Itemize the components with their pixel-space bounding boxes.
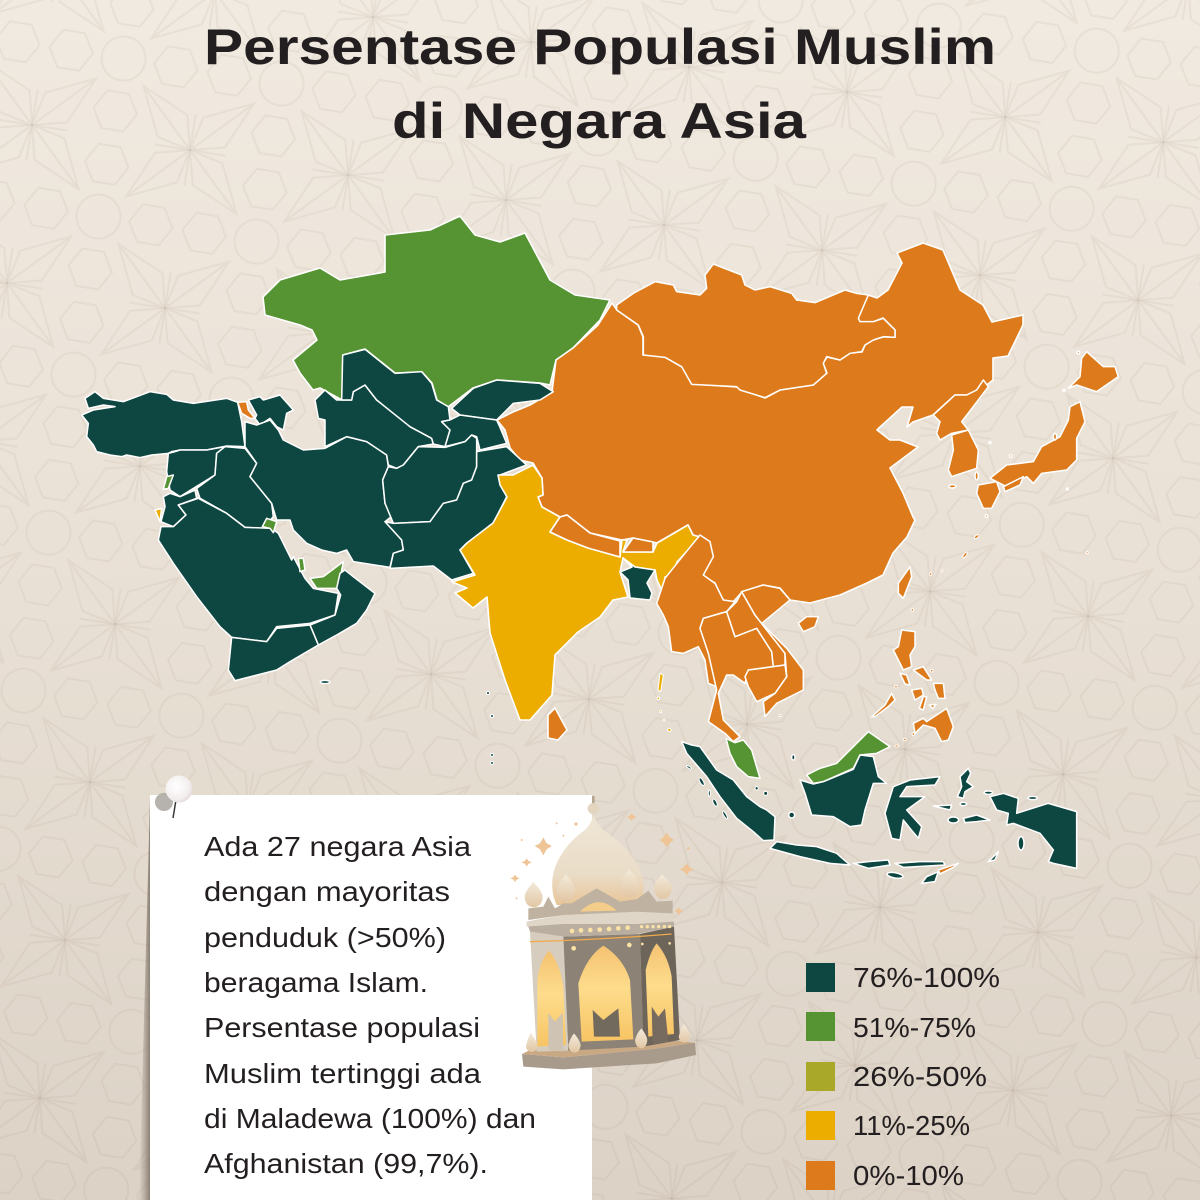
title: di Negara Asia: [392, 93, 807, 149]
Mongolia: [617, 264, 895, 398]
Shikoku: [1003, 477, 1023, 492]
Jordan: [161, 490, 197, 527]
Iran: [245, 420, 403, 567]
small scattered islands: [779, 534, 1088, 717]
Indonesian islands: [686, 755, 1037, 883]
Halmahera: [957, 768, 973, 798]
region: Korea and Japan: [933, 351, 1118, 517]
Iraq: [197, 447, 273, 528]
Mindanao: [913, 708, 953, 742]
card text: beragama Islam.: [204, 967, 428, 998]
Oman: [310, 570, 375, 645]
Thailand: [700, 612, 773, 742]
Maldives: [486, 692, 494, 764]
icon: mosque lantern: [510, 796, 696, 1069]
Palawan: [872, 693, 895, 717]
Hainan: [798, 617, 818, 632]
Timor-Leste: [938, 863, 958, 874]
icon: push pin: [155, 776, 192, 818]
card text: di Maladewa (100%) dan: [204, 1103, 536, 1134]
China: [497, 243, 1023, 603]
small domes: [525, 869, 690, 1053]
Philippine small islands: [895, 669, 933, 747]
Sabah and Sarawak: [807, 732, 890, 783]
Myanmar: [657, 535, 735, 687]
Kalimantan: [800, 755, 887, 827]
arches: [537, 951, 566, 1047]
legend item: 11%-25%: 11%-25%: [853, 1110, 970, 1141]
title: [204, 19, 996, 149]
Honshu: [990, 402, 1085, 487]
main dome: [552, 815, 644, 905]
Lebanon: [163, 475, 173, 489]
Kyrgyzstan: [452, 380, 553, 420]
base: [522, 1043, 696, 1069]
Saudi Arabia: [158, 498, 338, 642]
card text: Persentase populasi: [204, 1012, 480, 1043]
Tajikistan: [442, 415, 507, 450]
legend item: 51%-75%: 51%-75%: [853, 1012, 976, 1043]
Afghanistan: [383, 435, 477, 523]
Syria: [167, 447, 225, 497]
Luzon: [893, 630, 915, 670]
card text: penduduk (>50%): [204, 922, 446, 953]
Bhutan: [623, 538, 653, 552]
card shadow: [139, 800, 150, 1200]
legend item: 26%-50%: 26%-50%: [853, 1061, 987, 1092]
UAE: [310, 562, 343, 588]
legend item: 0%-10%: [806, 1160, 964, 1191]
Uzbekistan: [342, 349, 450, 447]
Nepal: [550, 515, 620, 557]
South Korea: [948, 430, 978, 477]
region: Southeast Asia: [657, 534, 1088, 883]
Turkey: [82, 392, 245, 458]
body: [530, 932, 568, 1052]
Bicol: [913, 667, 932, 680]
card text: [204, 831, 536, 1179]
Cebu: [929, 704, 936, 709]
title: Persentase Populasi Muslim: [204, 19, 996, 75]
region: South Asia: [452, 465, 700, 764]
window dots: [570, 925, 671, 951]
India: [452, 465, 700, 720]
card text: dengan mayoritas: [204, 876, 450, 907]
Sumatra: [682, 742, 775, 841]
card text: Afghanistan (99,7%).: [204, 1148, 488, 1179]
Armenia: [238, 402, 255, 418]
region: Philippines: [872, 630, 953, 747]
Mindoro: [900, 673, 910, 685]
card text: Muslim tertinggi ada: [204, 1058, 481, 1089]
Hokkaido: [1068, 352, 1118, 392]
note card: [139, 795, 592, 1200]
map of Asia: [82, 216, 1118, 883]
small islands: [949, 351, 1080, 517]
parapet: [528, 888, 673, 920]
Panay: [912, 688, 923, 700]
legend item: 0%-10%: 0%-10%: [853, 1160, 964, 1191]
Azerbaijan: [248, 395, 293, 430]
Laos: [727, 592, 785, 667]
legend item: 76%-100%: 76%-100%: [853, 962, 1000, 993]
Java: [770, 842, 850, 865]
Samar and Leyte: [933, 683, 945, 698]
North Korea: [933, 380, 988, 440]
Cambodia: [745, 665, 787, 702]
Andaman and Nicobar: [657, 673, 671, 732]
Pakistan: [385, 447, 527, 580]
card paper: [150, 795, 592, 1200]
region: Central Asia and China, Mongolia: [263, 216, 1023, 603]
Kazakhstan: [263, 216, 610, 407]
Vietnam: [742, 585, 803, 717]
Peninsular Malaysia: [726, 738, 760, 778]
Papua: [990, 793, 1077, 868]
Israel: [155, 508, 162, 522]
sparkles: [510, 813, 693, 915]
legend item: 26%-50%: [806, 1061, 987, 1092]
roof band: [527, 912, 674, 937]
Taiwan: [898, 567, 912, 598]
legend: [806, 962, 1000, 1191]
Turkmenistan: [315, 385, 433, 468]
Kuwait: [262, 518, 277, 533]
Kyushu: [977, 482, 1000, 508]
Socotra: [320, 680, 330, 684]
Sulawesi: [885, 777, 940, 840]
region: Middle East and Central Asia countries: [82, 349, 553, 684]
Sri Lanka: [548, 708, 567, 740]
Qatar: [298, 558, 305, 572]
Bangladesh: [620, 558, 655, 600]
Negros: [919, 697, 927, 710]
Yemen: [228, 625, 318, 681]
card text: Ada 27 negara Asia: [204, 831, 471, 862]
